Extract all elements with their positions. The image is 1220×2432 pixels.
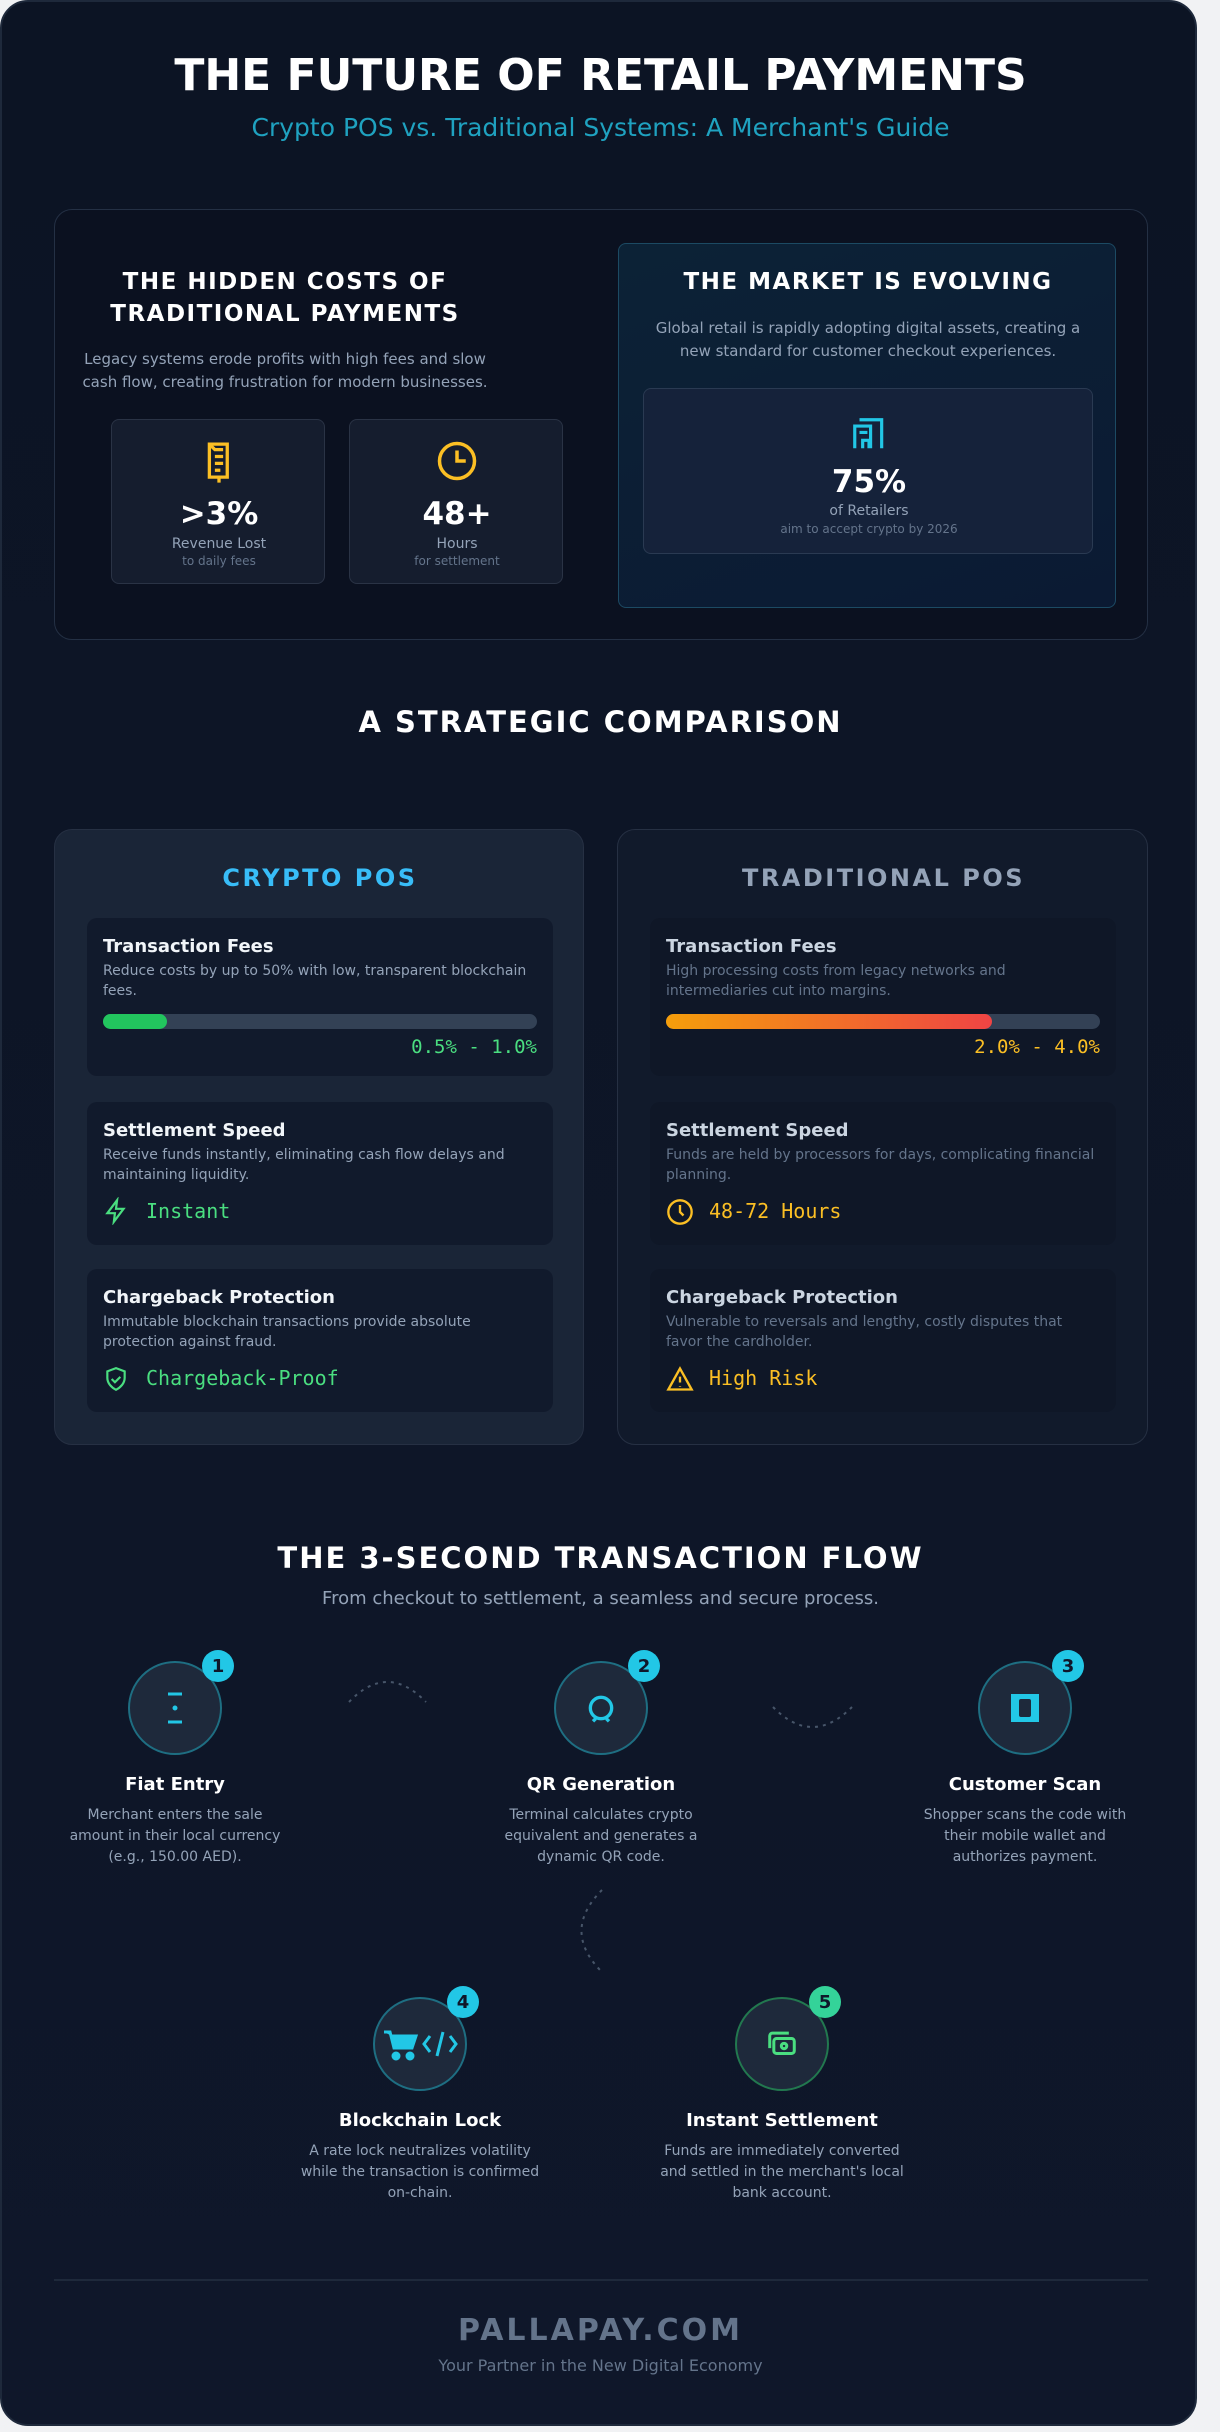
panel: overview bbox=[54, 209, 1148, 640]
panel: traditional pos bbox=[617, 829, 1148, 1445]
stat: 75% bbox=[643, 388, 1093, 554]
bar: crypto fee bbox=[103, 1014, 537, 1029]
card: crypto settlement: Settlement Speed bbox=[103, 1120, 286, 1141]
icon: shield bbox=[106, 1367, 126, 1391]
title: THE FUTURE OF RETAIL PAYMENTS bbox=[174, 50, 1027, 101]
heading: market: THE MARKET IS EVOLVING bbox=[683, 269, 1053, 295]
step 1: fiat entry bbox=[70, 1650, 280, 1865]
card: crypto chargeback: Immutable blockchain transactions provide absolute protection against fraud. bbox=[103, 1314, 471, 1350]
subtitle: Crypto POS vs. Traditional Systems: A Merchant's Guide bbox=[252, 113, 950, 142]
card: trad fees: 2.0% - 4.0% bbox=[974, 1036, 1100, 1058]
footer: tagline: Your Partner in the New Digital Economy bbox=[438, 2356, 763, 2375]
card: trad chargeback bbox=[650, 1269, 1116, 1412]
card: trad chargeback: Chargeback Protection bbox=[666, 1287, 898, 1308]
heading: transaction flow: THE 3-SECOND TRANSACTION FLOW bbox=[277, 1541, 924, 1575]
card: trad settlement: 48-72 Hours bbox=[709, 1199, 841, 1223]
card: trad chargeback: High Risk bbox=[709, 1366, 817, 1390]
card: trad settlement: Settlement Speed bbox=[666, 1120, 849, 1141]
icon: clock bbox=[438, 442, 476, 480]
stat: 75%: of Retailers bbox=[829, 503, 909, 519]
step 2: qr generation: QR Generation bbox=[527, 1774, 675, 1795]
heading: hidden costs: THE HIDDEN COSTS OF bbox=[123, 269, 447, 295]
arrows: dashed connectors bbox=[348, 1681, 853, 1970]
step 4: blockchain lock: A rate lock neutralizes volatility while the transaction is confirmed on-chain. bbox=[301, 2143, 539, 2201]
card: crypto chargeback: Chargeback-Proof bbox=[146, 1366, 339, 1390]
stat: revenue lost: to daily fees bbox=[182, 554, 256, 568]
step 5: instant settlement: 5 bbox=[819, 1992, 831, 2012]
card: trad settlement bbox=[650, 1102, 1116, 1245]
stat: hours: for settlement bbox=[414, 554, 500, 568]
step 5: instant settlement bbox=[660, 1986, 904, 2201]
card: crypto chargeback: Chargeback Protection bbox=[103, 1287, 335, 1308]
step 2: qr generation: 2 bbox=[638, 1656, 650, 1676]
step 4: blockchain lock bbox=[301, 1986, 539, 2201]
footer: brand: PALLAPAY.COM bbox=[458, 2313, 743, 2348]
step 5: instant settlement: Funds are immediately converted and settled in the merchant's local bank account. bbox=[660, 2143, 904, 2201]
stat: revenue lost: Revenue Lost bbox=[172, 536, 266, 552]
stat: 75%: aim to accept crypto by 2026 bbox=[780, 522, 958, 536]
heading: traditional pos: TRADITIONAL POS bbox=[742, 864, 1025, 892]
card: crypto fees: Transaction Fees bbox=[103, 936, 274, 957]
panel: crypto pos bbox=[54, 829, 584, 1445]
card: crypto fees: 0.5% - 1.0% bbox=[411, 1036, 537, 1058]
card: crypto fees bbox=[87, 918, 553, 1076]
text: flow subtitle: From checkout to settlement, a seamless and secure process. bbox=[322, 1588, 879, 1609]
bar: trad fee bbox=[666, 1014, 1100, 1029]
step 5: instant settlement: Instant Settlement bbox=[686, 2110, 878, 2131]
heading: hidden costs: TRADITIONAL PAYMENTS bbox=[110, 301, 460, 327]
card: crypto settlement: Receive funds instantly, eliminating cash flow delays and maintaining liquidity. bbox=[103, 1147, 505, 1183]
step 3: customer scan: 3 bbox=[1062, 1656, 1074, 1676]
step 1: fiat entry: 1 bbox=[212, 1656, 224, 1676]
icon: bolt bbox=[105, 1197, 126, 1225]
text: market desc: Global retail is rapidly adopting digital assets, creating a new standard for customer checkout experiences. bbox=[656, 319, 1080, 360]
heading: crypto pos: CRYPTO POS bbox=[222, 864, 418, 892]
icon: receipt bbox=[208, 442, 229, 483]
card: trad fees: Transaction Fees bbox=[666, 936, 837, 957]
step 1: fiat entry: Fiat Entry bbox=[125, 1774, 225, 1795]
stat: hours bbox=[349, 419, 563, 584]
stat: 75%: 75% bbox=[832, 464, 906, 500]
step 2: qr generation bbox=[504, 1650, 697, 1865]
heading: strategic comparison: A STRATEGIC COMPARISON bbox=[358, 705, 843, 739]
stat: hours: 48+ bbox=[422, 496, 492, 532]
step 3: customer scan bbox=[924, 1650, 1126, 1865]
step 4: blockchain lock: 4 bbox=[457, 1992, 469, 2012]
card: trad settlement: Funds are held by processors for days, complicating financial planning. bbox=[666, 1147, 1094, 1183]
step 2: qr generation: Terminal calculates crypto equivalent and generates a dynamic QR code. bbox=[504, 1807, 697, 1865]
icon: store bbox=[853, 418, 884, 448]
step 4: blockchain lock: Blockchain Lock bbox=[339, 2110, 501, 2131]
text: hidden costs desc: Legacy systems erode profits with high fees and slow cash flow, creating frustration for modern businesses. bbox=[82, 350, 488, 391]
icon: clock bbox=[667, 1199, 693, 1225]
card: trad chargeback: Vulnerable to reversals and lengthy, costly disputes that favor the cardholder. bbox=[666, 1314, 1062, 1350]
stat: hours: Hours bbox=[436, 536, 478, 552]
step 1: fiat entry: Merchant enters the sale amount in their local currency (e.g., 150.00 AED). bbox=[70, 1807, 280, 1865]
card: crypto chargeback bbox=[87, 1269, 553, 1412]
panel: market evolving bbox=[618, 243, 1116, 608]
card: trad fees: High processing costs from legacy networks and intermediaries cut into margins. bbox=[666, 963, 1006, 999]
icon: warning bbox=[666, 1366, 694, 1391]
card: crypto fees: Reduce costs by up to 50% with low, transparent blockchain fees. bbox=[103, 963, 526, 999]
stat: revenue lost: >3% bbox=[180, 496, 258, 532]
card: trad fees bbox=[650, 918, 1116, 1076]
step 3: customer scan: Shopper scans the code with their mobile wallet and authorizes payment. bbox=[924, 1807, 1126, 1865]
step 3: customer scan: Customer Scan bbox=[949, 1774, 1101, 1795]
stat: revenue lost bbox=[111, 419, 325, 584]
heading: hidden costs bbox=[110, 269, 460, 327]
card: crypto settlement: Instant bbox=[146, 1199, 230, 1223]
card: crypto settlement bbox=[87, 1102, 553, 1245]
